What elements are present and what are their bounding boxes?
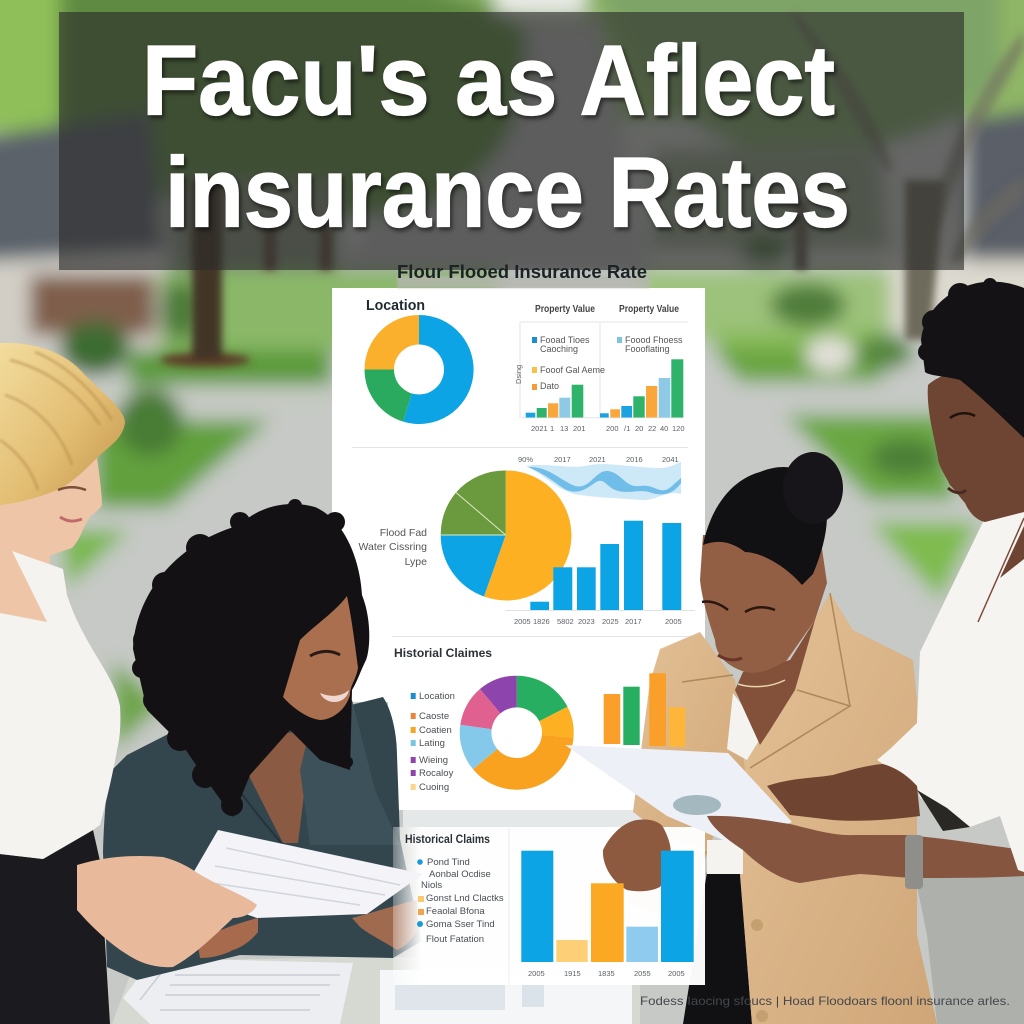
flood water wave timeline: 90%	[518, 455, 533, 464]
lower historical claims panel: Aonbal Ocdise	[429, 869, 491, 880]
flood water wave timeline: 2021	[589, 455, 606, 464]
title: insurance Rates	[165, 136, 850, 248]
location donut chart	[364, 297, 474, 424]
lower historical claims panel: 1915	[564, 969, 581, 978]
lower historical claims panel: 2055	[634, 969, 651, 978]
lower historical claims panel: Goma Sser Tind	[426, 919, 495, 930]
location donut chart: Location	[366, 297, 425, 314]
property value bar charts: 22	[648, 424, 656, 433]
flood water wave timeline: 2016	[626, 455, 643, 464]
property value bar charts: Dsing	[514, 365, 523, 384]
person: woman with blonde hair	[0, 343, 257, 1024]
lower historical claims panel: 1835	[598, 969, 615, 978]
lower historical claims panel: Feaolal Bfona	[426, 906, 485, 917]
flood pie and bar chart: Lype	[405, 556, 427, 568]
person: woman with afro and white shirt	[877, 278, 1024, 1024]
flood pie and bar chart: Flood Fad	[380, 527, 427, 539]
paper held by women	[565, 745, 792, 846]
lower historical claims panel: Historical Claims	[405, 832, 490, 846]
table papers	[112, 956, 640, 1024]
lower historical claims panel	[393, 827, 705, 985]
title band	[59, 12, 964, 270]
property value bar charts: 1	[550, 424, 554, 433]
property value bar charts: /1	[624, 424, 630, 433]
lower historical claims panel: Pond Tind	[427, 857, 470, 868]
flood water wave timeline: 2017	[554, 455, 571, 464]
property value bar charts: Property Value	[619, 304, 679, 315]
subtitle: Flour Flooed Insurance Rate	[397, 262, 647, 282]
property value bar charts: Foooflating	[625, 344, 670, 354]
property value bar charts: Dato	[540, 381, 559, 391]
historical claims donut and legend: Cuoing	[419, 782, 449, 793]
flood pie and bar chart: 1826	[533, 617, 550, 626]
property value bar charts: 13	[560, 424, 568, 433]
flood pie and bar chart: 2005	[514, 617, 531, 626]
lower historical claims panel: Gonst Lnd Clactks	[426, 893, 504, 904]
flood water wave timeline	[352, 448, 688, 500]
panel: white chart board	[332, 288, 705, 827]
property value bar charts: Property Value	[535, 304, 595, 315]
property value bar charts: Fooof Gal Aeme	[540, 365, 605, 375]
flood pie and bar chart: 2023	[578, 617, 595, 626]
property value bar charts: Caoching	[540, 344, 578, 354]
flood pie and bar chart	[359, 470, 700, 636]
claims bar chart	[521, 851, 694, 962]
historical claims donut and legend: Rocaloy	[419, 768, 454, 779]
historical claims donut and legend: Wieing	[419, 755, 448, 766]
arms of woman in white shirt	[707, 764, 1024, 889]
historical claims donut and legend: Coatien	[419, 725, 452, 736]
property value bar charts: 120	[672, 424, 685, 433]
historical claims donut and legend: Location	[419, 691, 455, 702]
flood pie and bar chart: 5802	[557, 617, 574, 626]
footer caption: Fodess Iaocing sfoucs | Hoad Floodoars floonl insurance arles.	[640, 994, 1010, 1008]
paper held by curly haired woman	[182, 830, 423, 918]
property value bar charts: 201	[573, 424, 586, 433]
historical claims donut and legend: Caoste	[419, 711, 449, 722]
lower historical claims panel: Niols	[421, 880, 442, 891]
historical claims donut and legend: Historial Claimes	[394, 646, 492, 660]
lower historical claims panel: 2005	[528, 969, 545, 978]
property value bar charts: 40	[660, 424, 668, 433]
flood pie and bar chart: Water Cissring	[359, 541, 427, 553]
property value bar charts: 200	[606, 424, 619, 433]
flood pie and bar chart: 2025	[602, 617, 619, 626]
flood pie and bar chart: 2005	[665, 617, 682, 626]
flood water wave timeline: 2041	[662, 455, 679, 464]
historical claims donut and legend: Lating	[419, 738, 445, 749]
property value bar charts: Foood Fhoess	[625, 335, 683, 345]
hand of beige blazer woman	[603, 819, 671, 891]
lower historical claims panel: Flout Fatation	[426, 934, 484, 945]
flood pie and bar chart: 2017	[625, 617, 642, 626]
property value bar charts: Fooad Tioes	[540, 335, 590, 345]
lower historical claims panel: 2005	[668, 969, 685, 978]
property value bar charts: 20	[635, 424, 643, 433]
person: woman with curly black hair	[103, 499, 422, 980]
historical claims donut and legend	[394, 646, 574, 793]
small orange and green bars	[604, 673, 685, 747]
title: Facu's as Aflect	[142, 24, 835, 136]
property value bar charts: 2021	[531, 424, 548, 433]
person: woman with bun and beige blazer	[627, 452, 937, 1024]
title	[142, 24, 850, 248]
property value bar charts	[514, 304, 688, 433]
